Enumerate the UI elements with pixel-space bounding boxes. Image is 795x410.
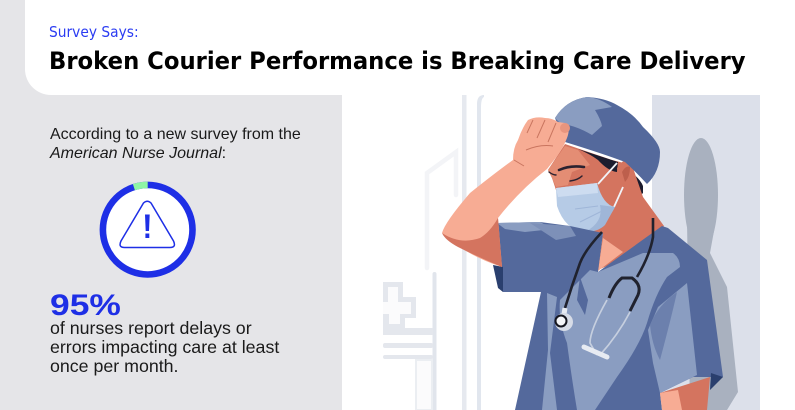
intro text xyxy=(49,126,301,162)
wall panel xyxy=(652,95,760,410)
eyebrow: Survey Says: xyxy=(49,23,139,41)
forehead light xyxy=(548,146,590,187)
title: Broken Courier Performance is Breaking Care Delivery xyxy=(49,47,746,75)
eyebrow and eye xyxy=(549,166,584,181)
ear xyxy=(617,160,634,187)
back hair xyxy=(622,170,643,198)
icon: warning gauge xyxy=(100,182,196,278)
neck light xyxy=(598,238,623,271)
neck and face xyxy=(548,144,664,270)
intro text: According to a new survey from the xyxy=(50,126,301,143)
scrubs torso xyxy=(493,222,723,410)
hair xyxy=(578,149,618,172)
statistic description: errors impacting care at least xyxy=(50,337,279,357)
scrub cap xyxy=(555,97,660,184)
statistic description: once per month. xyxy=(50,356,178,376)
statistic description: of nurses report delays or xyxy=(50,318,252,338)
mask xyxy=(556,163,623,232)
statistic description xyxy=(50,318,280,376)
background window and cross xyxy=(383,95,484,410)
panel: white header xyxy=(25,0,795,95)
stethoscope xyxy=(555,218,653,357)
statistic: 95% xyxy=(50,289,121,322)
arm and hand xyxy=(442,117,710,410)
intro text: American Nurse Journal: xyxy=(50,145,226,162)
shadow xyxy=(684,138,738,410)
panel: gray left background xyxy=(0,0,342,410)
